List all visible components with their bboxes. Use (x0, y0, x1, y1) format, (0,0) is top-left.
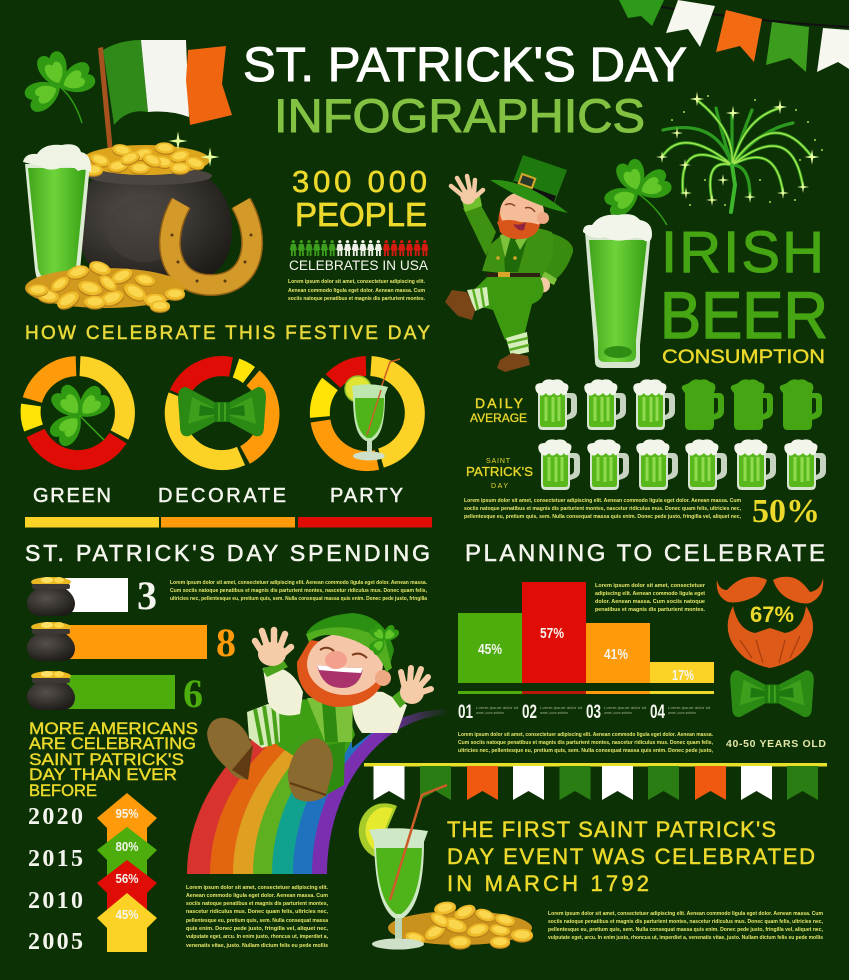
bar chart: planning to celebrate: Lorem ipsum dolor sit (476, 706, 518, 710)
text block: beer: Lorem ipsum dolor sit amet, consectetuer adipiscing elit. Aenean commodo ligula eget dolor. Aenean massa. Cum (464, 498, 741, 504)
bar chart: planning to celebrate: 02 (522, 702, 537, 723)
labels: donut names: DECORATE (158, 485, 286, 507)
text block: planning bottom: Cum sociis natoque penatibus et magnis dis parturient montes, nascetur ridiculus mus. Donec quam felis, (458, 740, 713, 746)
timeline: years (28, 804, 83, 955)
stat: 300 000 people: 300 000 (292, 164, 427, 199)
donut chart: party (320, 359, 415, 461)
bar chart: spending: 8 (216, 620, 236, 665)
donut chart: decorate (175, 366, 269, 460)
icon: shamrock in donut (47, 382, 113, 449)
garland: bottom (364, 763, 827, 800)
stat: 300 000 people (289, 164, 428, 273)
text block: planning top: Lorem ipsum dolor sit amet, consectetuer (595, 583, 706, 589)
callout: more Americans: ARE CELEBRATING (29, 735, 196, 753)
callout: more Americans (29, 720, 198, 800)
labels: donut names (33, 485, 403, 507)
text block: first event: vulputate eget, arcu. In enim justo, rhoncus ut, imperdiet a, venenatis vitae, justo. Nullam dictum felis eu pede mollis (548, 935, 823, 941)
callout: first event (447, 817, 815, 896)
icon: horseshoe (170, 203, 252, 285)
bar chart: planning to celebrate: amet, cons ectetur (476, 711, 505, 715)
bar chart: planning to celebrate: 03 (586, 702, 601, 723)
bar chart: planning to celebrate: 01 (458, 702, 473, 723)
text block: beer: pellentesque eu, pretium quis, sem. Nulla consequat massa quis enim. Donec pede justo, fringilla vel, aliquet nec, (464, 514, 741, 520)
text block: planning top (595, 583, 706, 613)
stat: 50 percent: 50% (752, 493, 820, 530)
timeline: years: 2010 (28, 888, 83, 914)
labels: donut names: PARTY (330, 485, 403, 507)
text block: rainbow: sociis natoque penatibus et magnis dis parturient montes, (186, 901, 328, 907)
bar chart: spending: 6 (183, 671, 203, 716)
heading: spending: ST. PATRICK'S DAY SPENDING (25, 540, 430, 566)
labels: mug rows: DAY (491, 483, 508, 490)
illustration: dancing leprechaun (445, 155, 573, 372)
legend bars (25, 517, 432, 528)
heading: Irish beer consumption: BEER (660, 278, 828, 352)
callout: more Americans: BEFORE (29, 782, 97, 800)
bar chart: planning to celebrate: Lorem ipsum dolor sit (604, 706, 646, 710)
icon: bow tie in donut (178, 387, 266, 436)
bar chart: planning to celebrate: Lorem ipsum dolor sit (668, 706, 710, 710)
donut chart: green (31, 366, 125, 460)
text block: planning top: adipiscing elit. Aenean commodo ligula eget (595, 591, 705, 597)
title (243, 39, 687, 142)
text block: people: Aenean commodo ligula eget dolor. Aenean massa. Cum (288, 288, 425, 294)
labels: donut names: GREEN (33, 485, 111, 507)
text block: rainbow: pellentesque eu, pretium quis, sem. Nulla consequat massa (186, 918, 329, 924)
icon: cocktail (359, 785, 447, 950)
heading: Irish beer consumption: CONSUMPTION (662, 347, 825, 368)
arrows: yearly percentages: 45% (116, 907, 139, 922)
mugs: Saint Patrick's day (538, 439, 826, 490)
heading: Irish beer consumption: IRISH (661, 220, 824, 285)
timeline: years: 2015 (28, 846, 83, 872)
text block: rainbow: vulputate eget, arcu. In enim justo, rhoncus ut, imperdiet a, (186, 934, 328, 940)
icon: moustache and beard 67 percent: 67% (750, 602, 794, 627)
labels: mug rows: SAINT (486, 458, 511, 465)
text block: planning bottom (458, 732, 713, 754)
top garland (619, 0, 849, 72)
labels: mug rows: PATRICK'S (466, 464, 533, 479)
labels: mug rows (466, 395, 533, 490)
text block: planning top: dolor. Aenean massa. Cum sociis natoque (595, 599, 705, 605)
text block: rainbow: quis enim. Donec pede justo, fringilla vel, aliquet nec, (186, 926, 329, 932)
illustration: sliding leprechaun (207, 613, 431, 802)
labels: mug rows: AVERAGE (470, 411, 527, 425)
timeline: years: 2020 (28, 804, 83, 830)
text block: planning bottom: Lorem ipsum dolor sit amet, consectetuer adipiscing elit. Aenean commodo ligula eget dolor. Aenean massa. (458, 732, 713, 738)
icon: coin pile bottom (388, 900, 533, 950)
icon: pot of gold (78, 131, 232, 285)
heading: how celebrate: HOW CELEBRATE THIS FESTIVE DAY (25, 323, 430, 344)
text block: spending: Cum sociis natoque penatibus et magnis dis parturient montes, nascetur ridiculus mus. Donec quam felis, (170, 588, 427, 594)
callout: first event: THE FIRST SAINT PATRICK'S (447, 817, 776, 842)
bar chart: planning to celebrate: amet, cons ectetur (540, 711, 569, 715)
arrows: yearly percentages: 80% (116, 839, 139, 854)
text block: people (288, 279, 425, 302)
bar chart: planning to celebrate: 17% (672, 667, 694, 684)
label: age range: 40-50 YEARS OLD (726, 738, 826, 750)
text block: first event (548, 911, 823, 941)
text block: planning bottom: ultricies nec, pellentesque eu, pretium quis, sem. Nulla consequat massa quis enim. Donec pede justo, (458, 748, 713, 754)
bar chart: planning to celebrate: 45% (478, 641, 502, 658)
text block: rainbow: venenatis vitae, justo. Nullam dictum felis eu pede mollis (186, 943, 328, 949)
text block: rainbow: nascetur ridiculus mus. Donec quam felis, ultricies nec, (186, 909, 328, 915)
bar chart: planning to celebrate: 57% (540, 625, 564, 642)
icon: coin pile (25, 258, 185, 313)
heading: Irish beer consumption (660, 220, 828, 368)
illustration: rainbow (187, 640, 450, 880)
text block: spending: ultricies nec, pellentesque eu, pretium quis, sem. Nulla consequat massa quis enim. Donec pede justo, fringilla (170, 596, 428, 602)
text block: spending (170, 580, 428, 602)
callout: first event: DAY EVENT WAS CELEBRATED (447, 844, 815, 869)
icon: moustache and beard 67 percent (717, 577, 823, 668)
text block: beer (464, 498, 741, 520)
mugs: daily average (535, 379, 822, 430)
bar chart: planning to celebrate: amet, cons ectetur (668, 711, 697, 715)
timeline: years: 2005 (28, 929, 83, 955)
icon: green beer glass (23, 144, 91, 285)
bar chart: planning to celebrate: amet, cons ectetur (604, 711, 633, 715)
bar chart: planning to celebrate: 41% (604, 646, 628, 663)
arrows: yearly percentages (97, 793, 157, 952)
bar chart: planning to celebrate (458, 582, 714, 723)
text block: people: Lorem ipsum dolor sit amet, consectetuer adipiscing elit. (288, 279, 425, 285)
stat: 300 000 people: CELEBRATES IN USA (289, 258, 428, 273)
labels: mug rows: DAILY (475, 395, 524, 411)
callout: first event: IN MARCH 1792 (447, 871, 649, 896)
heading: planning: PLANNING TO CELEBRATE (465, 540, 825, 567)
icon: cocktail in donut (345, 359, 400, 460)
text block: first event: pellentesque eu, pretium quis, sem. Nulla consequat massa quis enim. Donec pede justo, fringilla vel, aliquet nec, (548, 927, 823, 933)
icon: bow tie (730, 670, 814, 717)
text block: first event: Lorem ipsum dolor sit amet, consectetuer adipiscing elit. Aenean commodo ligula eget dolor. Aenean massa. Cum (548, 911, 823, 917)
text block: rainbow (186, 885, 329, 949)
bar chart: spending: 3 (137, 573, 157, 618)
text block: spending: Lorem ipsum dolor sit amet, consectetuer adipiscing elit. Aenean commodo ligula eget dolor. Aenean massa. (170, 580, 427, 586)
text block: first event: sociis natoque penatibus et magnis dis parturient montes, nascetur ridiculus mus. Donec quam felis, ultricies nec, (548, 919, 823, 925)
icon: big green beer (583, 214, 652, 368)
text block: people: sociis natoque penatibus et magnis dis parturient montes. (288, 296, 425, 302)
arrows: yearly percentages: 95% (116, 806, 139, 821)
stat: 300 000 people: PEOPLE (295, 196, 427, 233)
icon: Irish flag (98, 40, 232, 152)
bar chart: planning to celebrate: 04 (650, 702, 665, 723)
pictogram: people row (290, 240, 428, 256)
bar chart: spending (27, 573, 236, 716)
callout: more Americans: DAY THAN EVER (29, 766, 177, 784)
text block: planning top: penatibus et magnis dis parturient montes. (595, 607, 705, 613)
text block: rainbow: Lorem ipsum dolor sit amet, consectetuer adipiscing elit. (186, 885, 328, 891)
bar chart: planning to celebrate: Lorem ipsum dolor sit (540, 706, 582, 710)
icon: shamrock top left (15, 41, 105, 132)
title: ST. PATRICK'S DAY (243, 39, 687, 92)
arrows: yearly percentages: 56% (116, 871, 139, 886)
icon: shamrock by beer (595, 149, 681, 236)
callout: more Americans: MORE AMERICANS (29, 720, 198, 738)
text block: rainbow: Aenean commodo ligula eget dolor. Aenean massa. Cum (186, 893, 328, 899)
icon: fireworks (656, 92, 823, 212)
callout: more Americans: SAINT PATRICK'S (29, 751, 184, 769)
title: INFOGRAPHICS (274, 89, 645, 142)
text block: beer: sociis natoque penatibus et magnis dis parturient montes, nascetur ridiculus mus. Donec quam felis, ultricies nec, (464, 506, 741, 512)
